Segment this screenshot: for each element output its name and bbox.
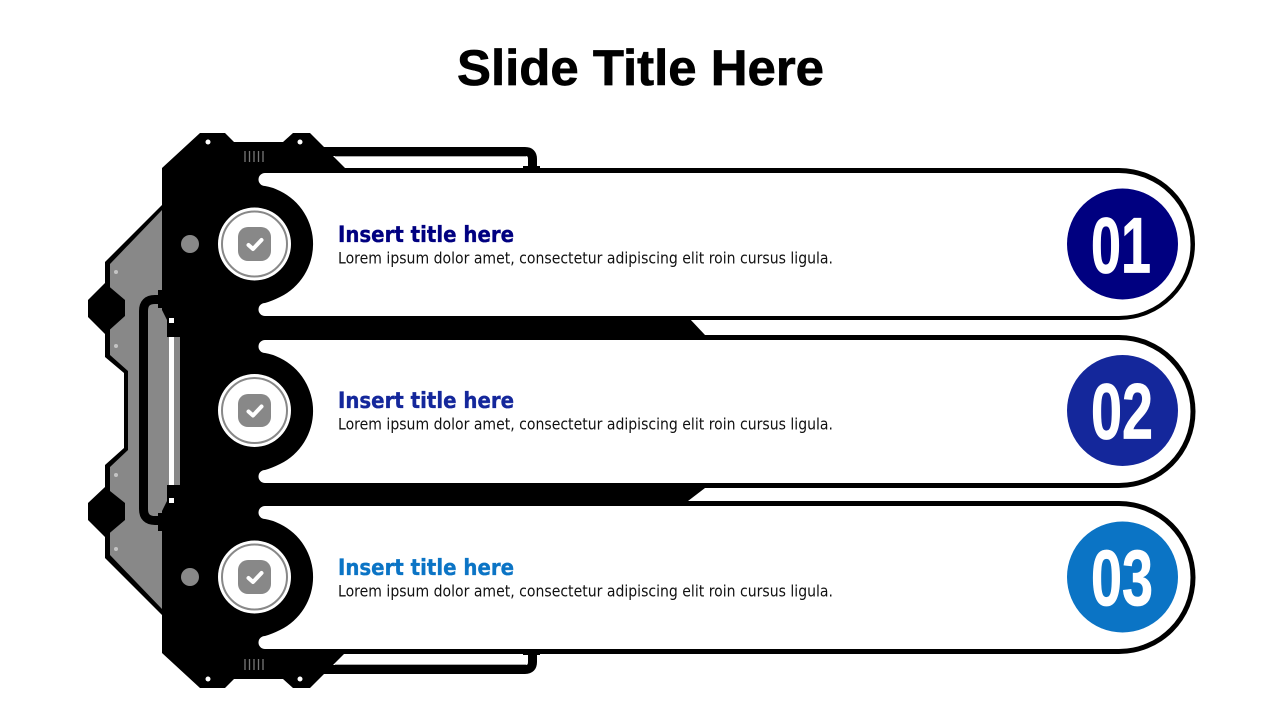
- title: Slide Title Here: [457, 40, 824, 96]
- card 3 body text: Lorem ipsum dolor amet, consectetur adipiscing elit roin cursus ligula.: [338, 582, 833, 600]
- card 1 body text: Lorem ipsum dolor amet, consectetur adipiscing elit roin cursus ligula.: [338, 248, 833, 268]
- side bracket tube: [144, 300, 162, 520]
- number badge 01: 01: [1091, 200, 1151, 290]
- card 1: [218, 168, 1195, 320]
- card 2 heading: Insert title here: [338, 389, 514, 414]
- icon: check badge 3: [218, 540, 291, 614]
- icon: check badge 2: [218, 374, 291, 447]
- connector band between cards 2 and 3: [200, 483, 710, 507]
- number badge 03: [1067, 522, 1178, 632]
- card 2 body text: Lorem ipsum dolor amet, consectetur adipiscing elit roin cursus ligula.: [338, 414, 833, 434]
- card 1 heading: Insert title here: [338, 223, 514, 248]
- panel: black frame body: [158, 133, 345, 688]
- card 3: [218, 501, 1196, 654]
- number badge 03: 03: [1091, 533, 1153, 622]
- number badge 01: [1067, 188, 1178, 300]
- top bracket tube: [323, 152, 540, 169]
- connector band between cards 1 and 2: [200, 316, 710, 341]
- icon: check badge 1: [218, 208, 291, 280]
- bottom bracket tube: [323, 652, 540, 670]
- number badge 02: 02: [1091, 366, 1153, 456]
- number badge 02: [1067, 355, 1178, 466]
- panel: gray back plate: [88, 205, 180, 615]
- card 2: [218, 335, 1196, 488]
- card 3 heading: Insert title here: [338, 556, 514, 581]
